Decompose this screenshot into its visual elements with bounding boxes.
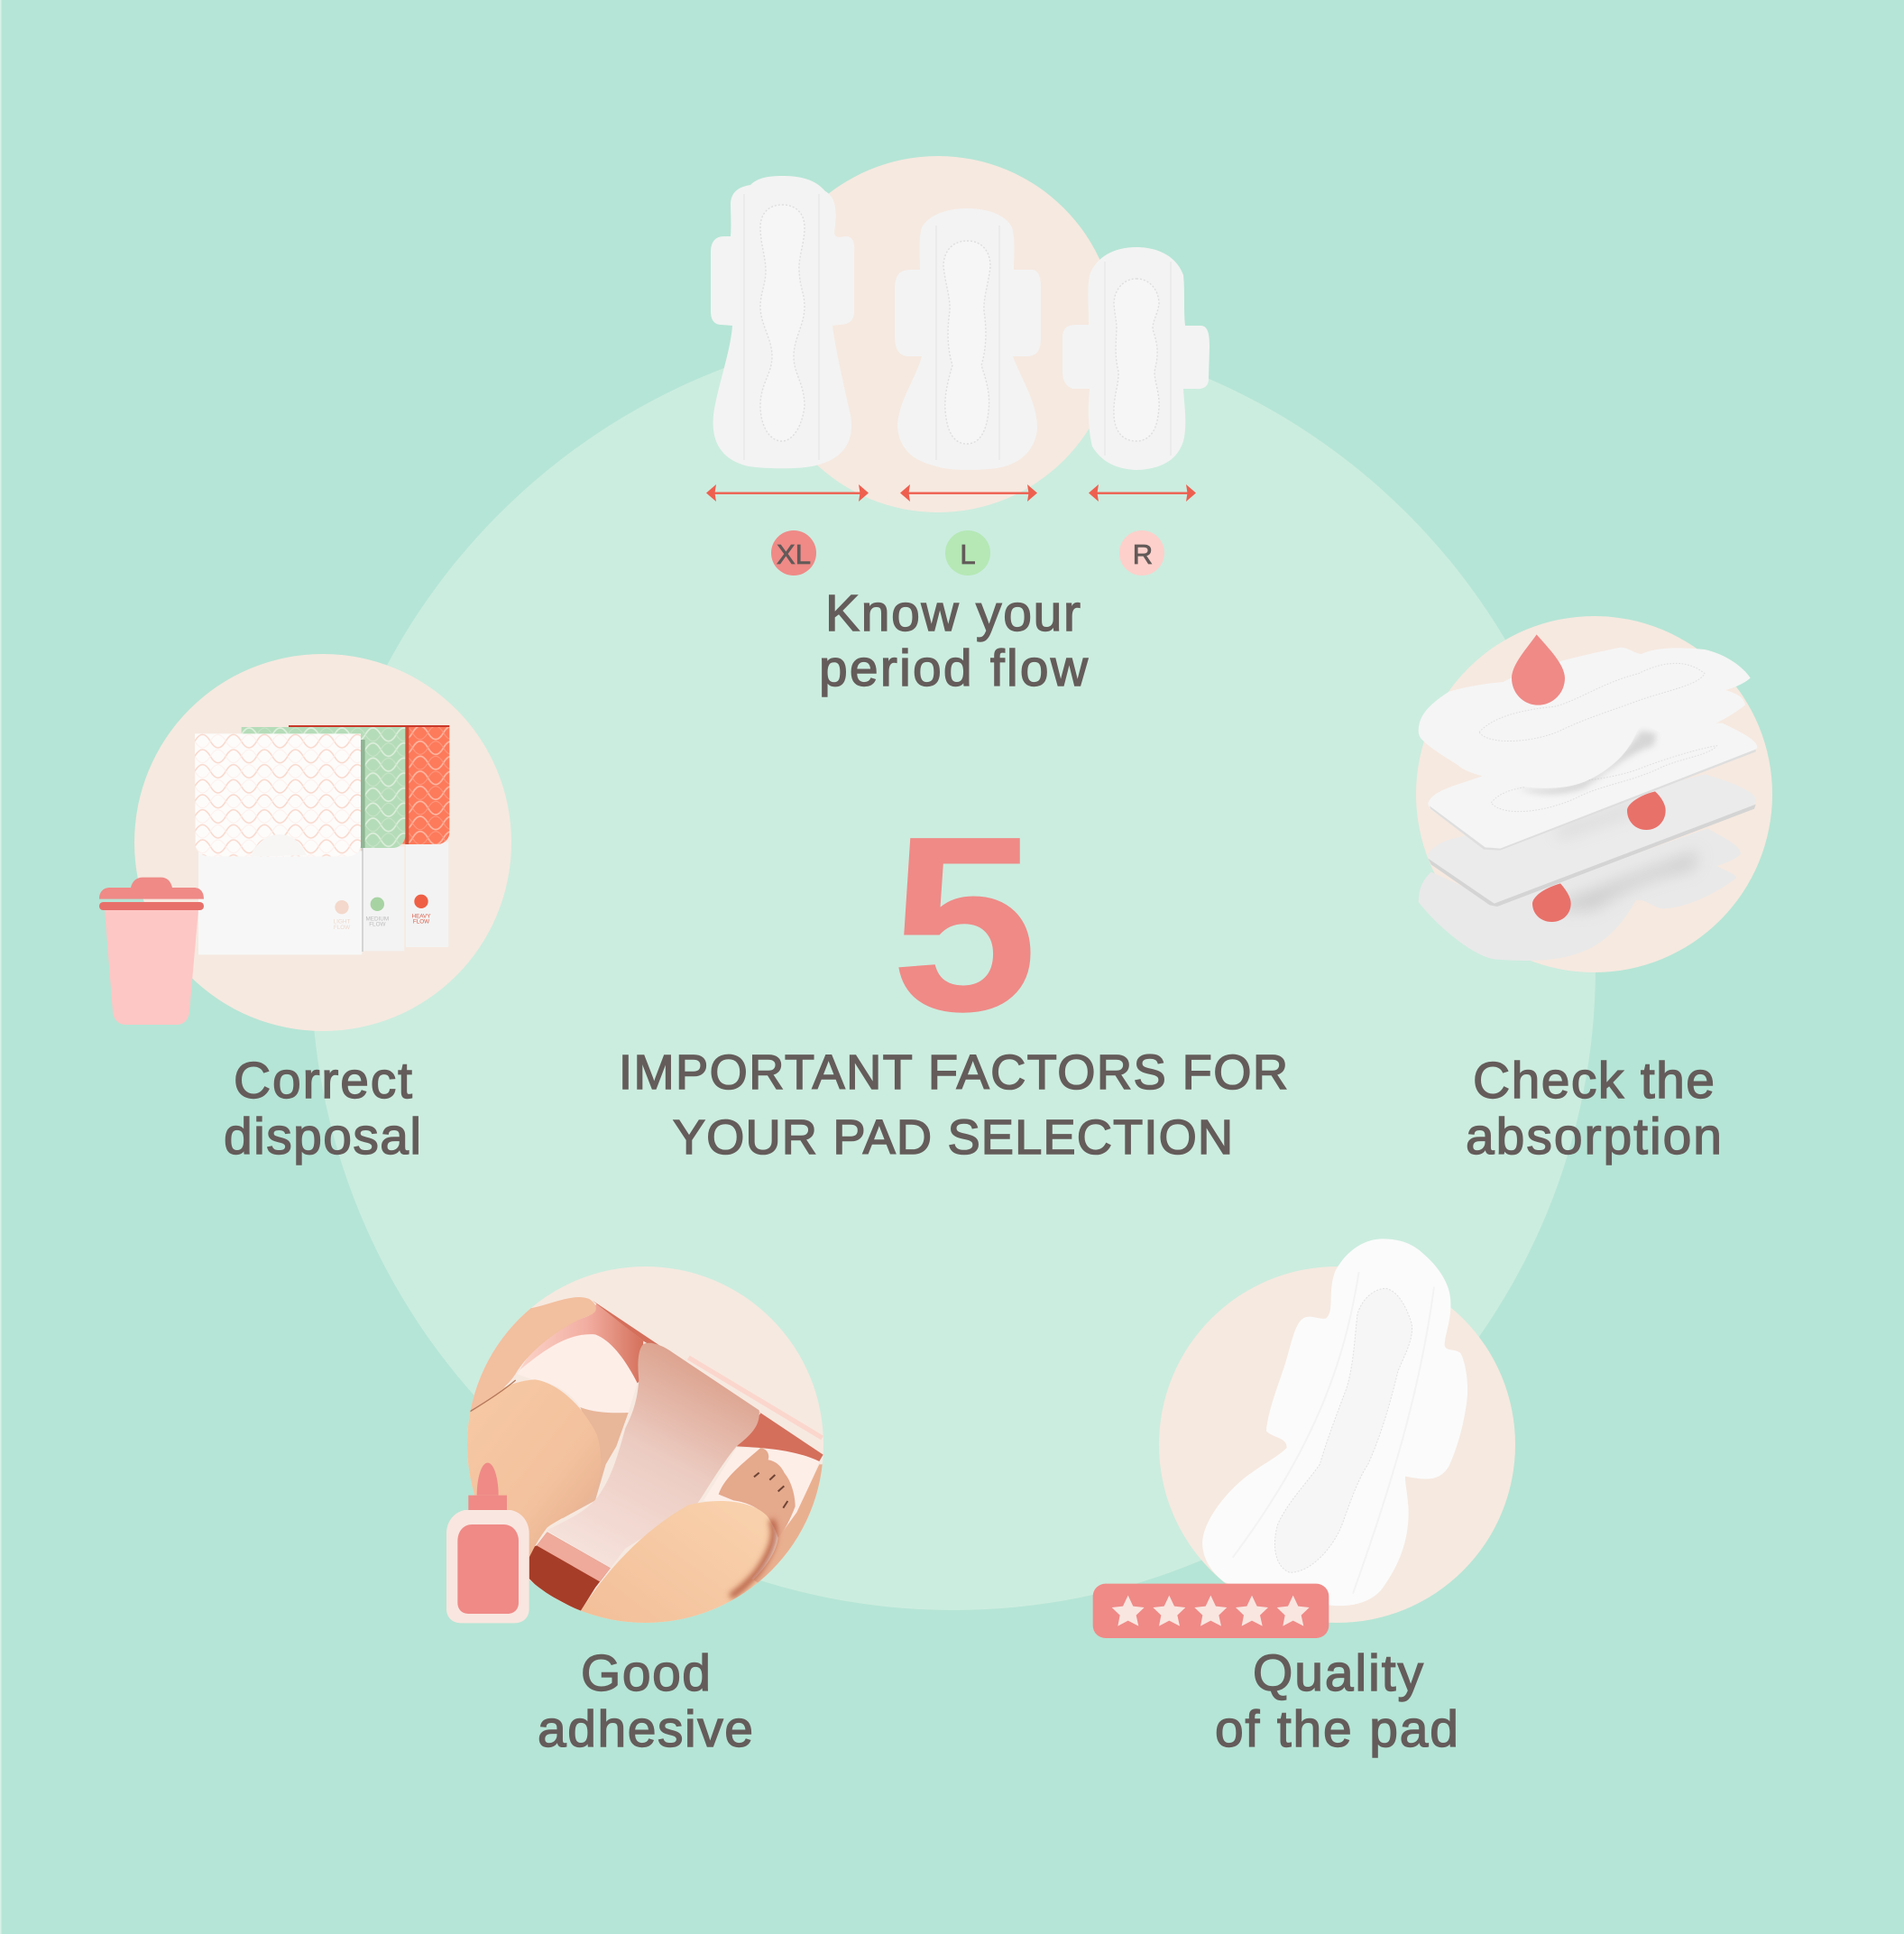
shadow beneath top layer [1518, 731, 1657, 794]
quilted layer [1428, 723, 1757, 850]
center heading [619, 784, 1288, 1165]
star rating badge [1093, 1584, 1329, 1638]
pack: light flow: LIGHT [334, 919, 350, 926]
heading text: YOUR PAD SELECTION [673, 1110, 1233, 1165]
icon: glue bottle [446, 1463, 529, 1623]
icon: trash bin [99, 878, 204, 1025]
label: good adhesive: Good [581, 1644, 711, 1702]
panel: know your period flow [706, 156, 1210, 697]
badge L [945, 530, 990, 576]
layered pad illustration [1419, 634, 1757, 961]
peach circle [134, 654, 511, 1031]
panel: quality of the pad [1093, 1239, 1515, 1758]
central light circle [311, 326, 1596, 1610]
label: correct disposal: Correct [234, 1052, 412, 1110]
pad illustration [1202, 1239, 1467, 1606]
label: quality of the pad: of the pad [1215, 1700, 1458, 1758]
badge R [1119, 530, 1164, 576]
pack: medium flow [242, 727, 405, 951]
blood drop middle [1627, 791, 1666, 830]
panel: good adhesive [433, 1266, 830, 1758]
pack: heavy flow [289, 725, 449, 947]
blood drop bottom [1532, 883, 1571, 922]
pad R [1062, 247, 1210, 470]
arrow R [1089, 484, 1196, 502]
panel: check the absorption [1416, 616, 1772, 1165]
big number 5: 5 [890, 784, 1038, 1064]
peach circle [759, 156, 1117, 512]
badge XL: XL [777, 539, 811, 570]
label: know your period flow: period flow [819, 640, 1089, 697]
peach circle [467, 1266, 823, 1623]
photo illustration: pad in underwear [467, 1297, 823, 1623]
label: quality of the pad: Quality [1253, 1644, 1423, 1702]
panel: correct disposal [99, 654, 511, 1165]
pack: heavy flow: HEAVY [412, 913, 431, 919]
badge R: R [1133, 539, 1153, 570]
pad XL [711, 176, 854, 468]
label: correct disposal: disposal [224, 1108, 421, 1165]
peach circle [1416, 616, 1772, 972]
pack: light flow [195, 733, 363, 954]
pad packs [195, 725, 449, 954]
perforated layer [1428, 774, 1756, 905]
top layer [1419, 648, 1751, 788]
label: check the absorption: absorption [1466, 1108, 1722, 1165]
label: know your period flow: Know your [825, 585, 1081, 642]
pack: medium flow: MEDIUM [365, 916, 389, 922]
pack: medium flow: FLOW [369, 922, 385, 928]
arrow XL [706, 484, 869, 502]
pack: light flow: FLOW [334, 925, 350, 931]
heading text: IMPORTANT FACTORS FOR [619, 1045, 1288, 1100]
blood drop top [1512, 634, 1565, 705]
pad L [895, 208, 1041, 470]
badge L: L [960, 539, 976, 570]
label: check the absorption: Check the [1473, 1052, 1715, 1110]
peach circle [1159, 1266, 1515, 1623]
pack: heavy flow: FLOW [413, 919, 429, 926]
badge XL [771, 530, 816, 576]
bottom layer [1419, 828, 1741, 961]
arrow L [900, 484, 1037, 502]
label: good adhesive: adhesive [538, 1700, 753, 1758]
